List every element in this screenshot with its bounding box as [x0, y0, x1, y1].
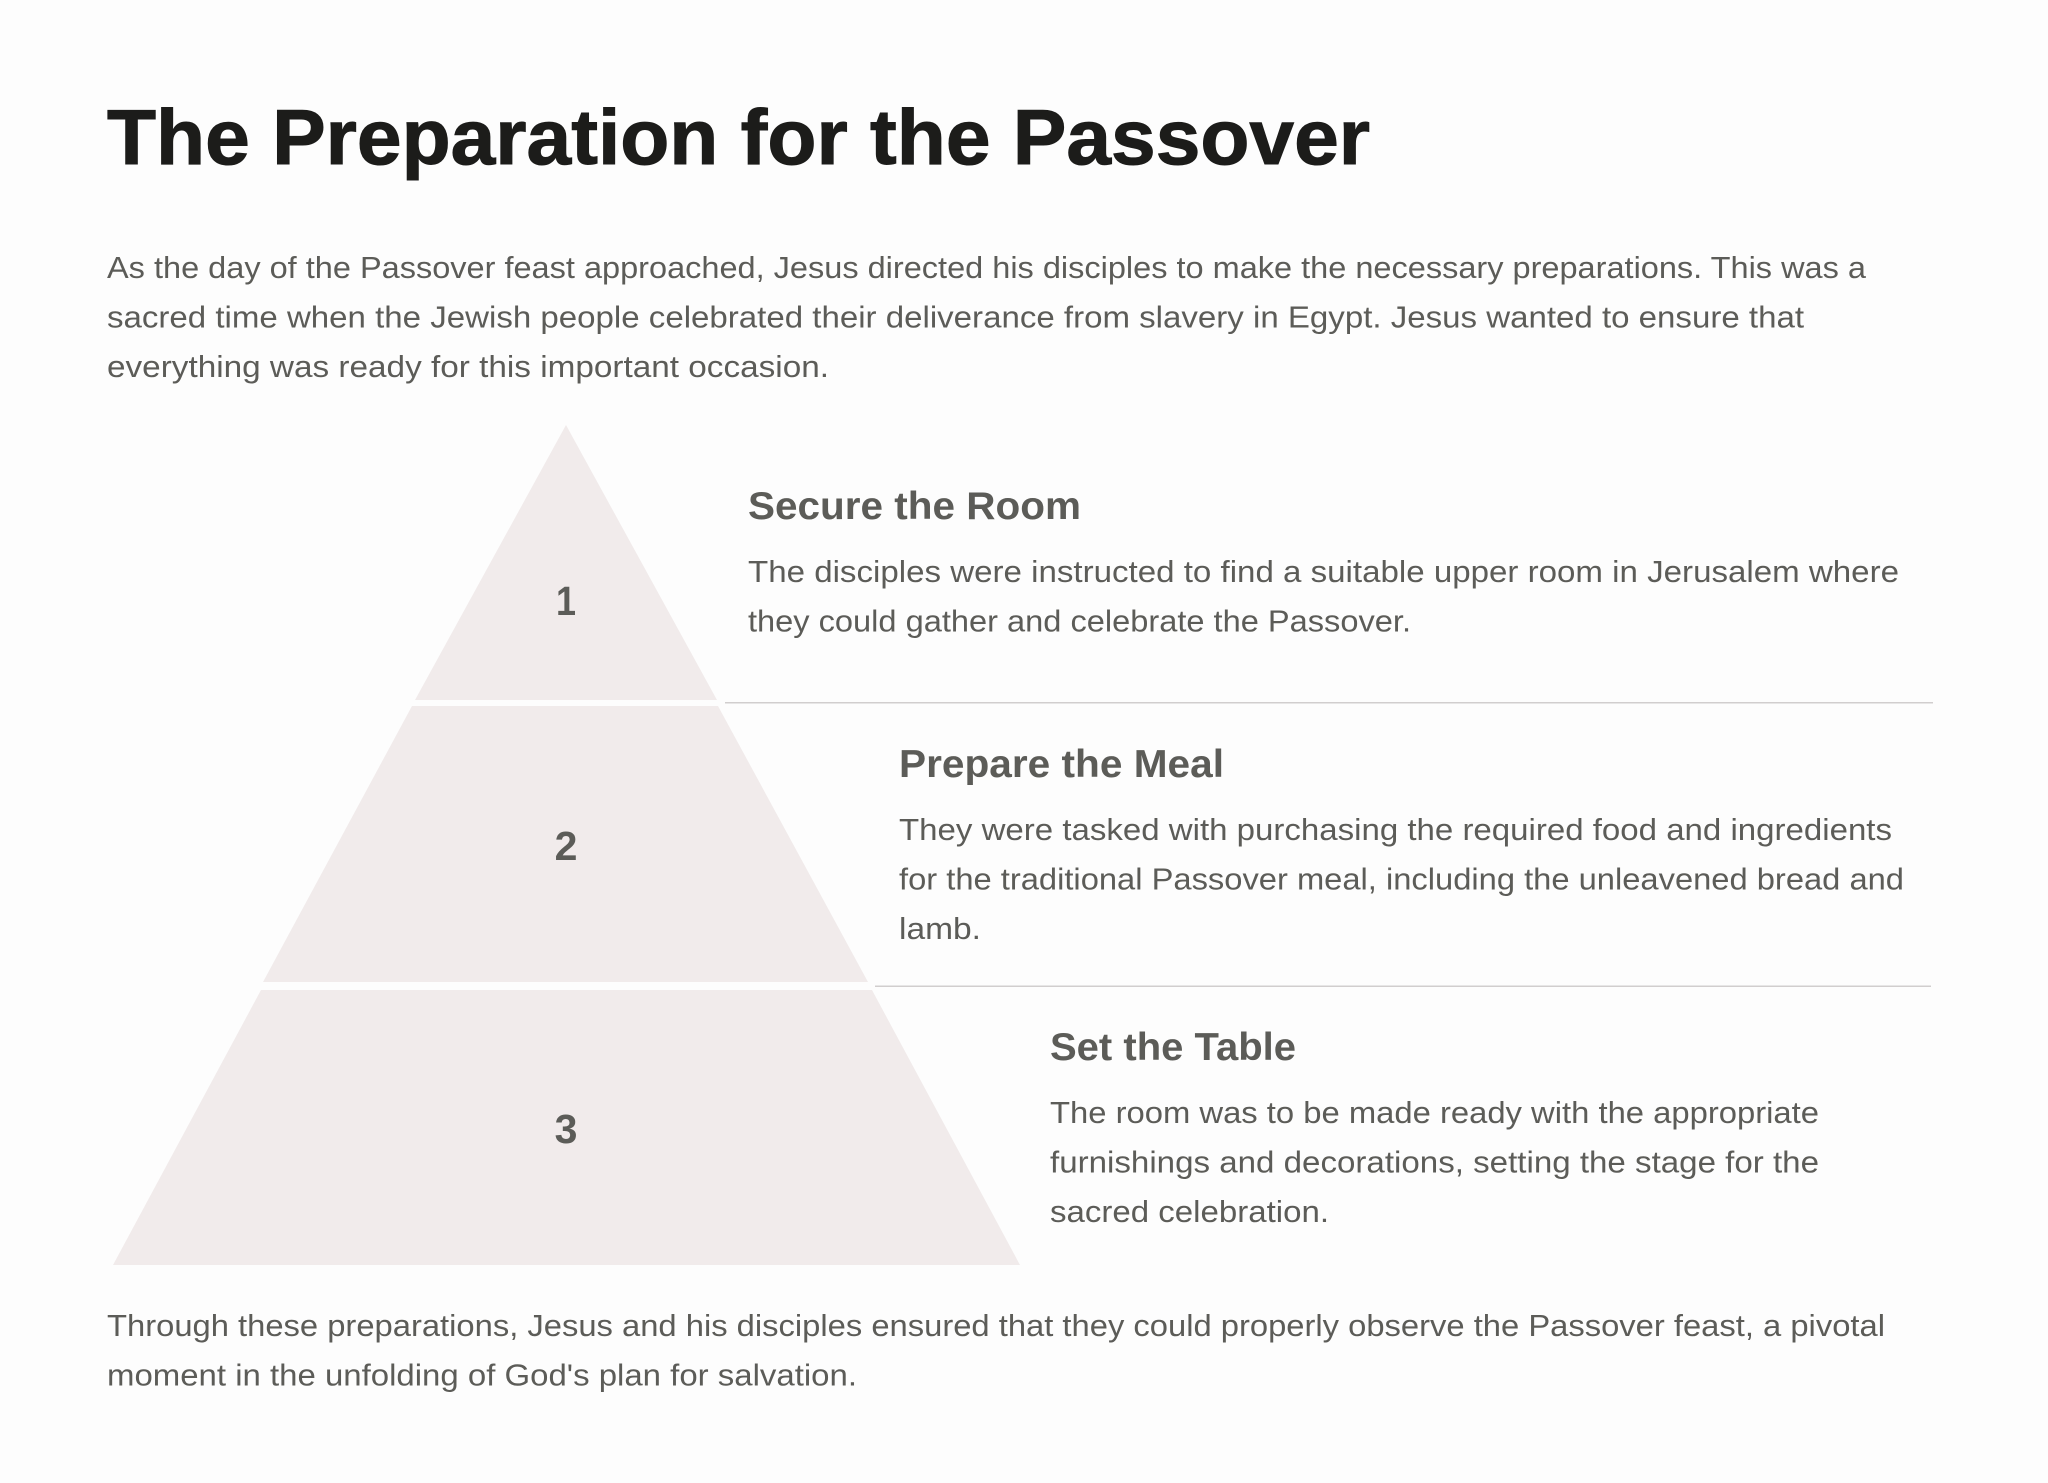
title: The Preparation for the Passover — [107, 93, 1370, 181]
intro text block: everything was ready for this important occasion. — [107, 349, 829, 384]
pyramid tier 1 — [415, 425, 717, 700]
step 2: Prepare the Meal — [899, 743, 1904, 946]
step 3: Set the Table — [1050, 1026, 1819, 1229]
step 2 description: They were tasked with purchasing the required food and ingredients — [899, 812, 1892, 847]
step 2 description: for the traditional Passover meal, including the unleavened bread and — [899, 862, 1904, 896]
closing text block: Through these preparations, Jesus and his disciples ensured that they could properly observe the Passover feast, a pivotal — [107, 1308, 1885, 1343]
step 2 description — [899, 812, 1904, 946]
step 2 description: lamb. — [899, 911, 981, 946]
intro text block — [107, 250, 1867, 384]
pyramid tier 2: 2 — [555, 823, 577, 869]
step 1 description: they could gather and celebrate the Passover. — [748, 604, 1411, 638]
step 3 description: sacred celebration. — [1050, 1194, 1329, 1229]
pyramid tier 2 — [263, 706, 868, 982]
pyramid tier 3 — [113, 990, 1020, 1265]
step 1 description — [748, 554, 1899, 638]
closing text block: moment in the unfolding of God's plan for salvation. — [107, 1358, 857, 1392]
closing text block — [107, 1308, 1885, 1392]
pyramid tier 1: 1 — [556, 578, 576, 624]
pyramid tier 3: 3 — [555, 1106, 577, 1152]
step 3 heading: Set the Table — [1050, 1026, 1296, 1069]
pyramid chart — [113, 425, 1020, 1265]
step 1: Secure the Room — [748, 485, 1899, 638]
step 1 heading: Secure the Room — [748, 485, 1081, 528]
step 3 description: The room was to be made ready with the appropriate — [1050, 1095, 1819, 1130]
step 2 heading: Prepare the Meal — [899, 743, 1224, 786]
step 3 description: furnishings and decorations, setting the stage for the — [1050, 1144, 1819, 1180]
step 3 description — [1050, 1095, 1819, 1229]
intro text block: As the day of the Passover feast approached, Jesus directed his disciples to make the necessary preparations. This was a — [107, 250, 1867, 285]
intro text block: sacred time when the Jewish people celebrated their deliverance from slavery in Egypt. Jesus wanted to ensure that — [107, 300, 1804, 334]
step 1 description: The disciples were instructed to find a suitable upper room in Jerusalem where — [748, 554, 1899, 589]
